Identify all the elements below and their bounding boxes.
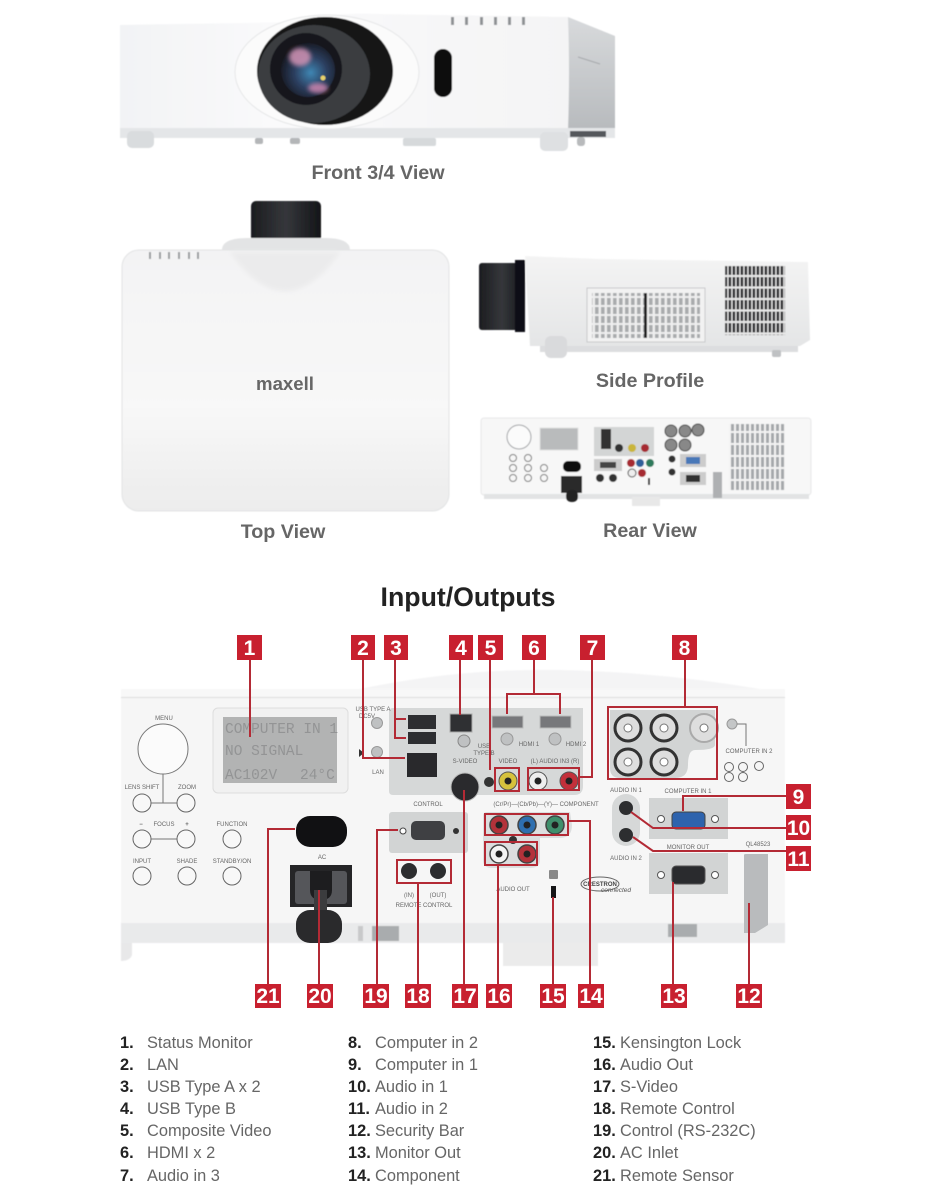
callout number tags, bottom row: 13 bbox=[662, 985, 686, 1008]
connector bay: USB bbox=[478, 744, 490, 750]
callout number tags, top row: 2 bbox=[357, 637, 369, 660]
leader lines and highlight boxes bbox=[250, 660, 787, 985]
control buttons: MENU bbox=[155, 716, 173, 722]
control buttons: FUNCTION bbox=[216, 822, 248, 828]
connector bay: LAN bbox=[372, 770, 384, 776]
legend column 2: Audio in 2 bbox=[375, 1100, 448, 1118]
caption: top view: Top View bbox=[241, 521, 326, 543]
audio in 1 and 2 jacks bbox=[610, 788, 642, 862]
legend column 2: Computer in 2 bbox=[375, 1034, 478, 1052]
status monitor display: COMPUTER IN 1 bbox=[225, 722, 338, 738]
callout number tags, top row bbox=[237, 635, 697, 660]
legend column 1: LAN bbox=[147, 1056, 179, 1074]
callout number tags, top row: 7 bbox=[587, 637, 598, 660]
legend column 3: 19. bbox=[593, 1122, 616, 1140]
AC inlet with cable bbox=[290, 855, 352, 943]
remote sensor bbox=[296, 816, 347, 847]
computer in 2 BNC connectors bbox=[610, 710, 773, 782]
logo: Crestron connected: CRESTRON bbox=[583, 882, 617, 888]
security bar bbox=[744, 854, 768, 933]
photo: front 3/4 view projector bbox=[120, 14, 615, 151]
legend column 3: 21. bbox=[593, 1167, 616, 1185]
connector bay: S-VIDEO bbox=[453, 759, 478, 765]
heading: Input/Outputs: Input/Outputs bbox=[381, 582, 555, 612]
computer in 2 BNC connectors: COMPUTER IN 2 bbox=[725, 749, 773, 755]
legend column 2: 12. bbox=[348, 1122, 371, 1140]
callout number tags, top row: 3 bbox=[390, 637, 402, 660]
legend column 2: 11. bbox=[348, 1100, 370, 1118]
control buttons: STANDBY/ON bbox=[213, 859, 251, 865]
legend column 2 bbox=[348, 1034, 478, 1185]
computer in 1 and monitor out VGA: COMPUTER IN 1 bbox=[664, 789, 712, 795]
control RS-232C port: CONTROL bbox=[413, 802, 443, 808]
connector bay: HDMI 1 bbox=[519, 742, 540, 748]
control buttons: ZOOM bbox=[178, 785, 196, 791]
callout number tags, bottom row: 18 bbox=[406, 985, 430, 1008]
caption: side profile: Side Profile bbox=[596, 370, 704, 392]
legend column 3: Remote Sensor bbox=[620, 1167, 734, 1185]
callout number tags, bottom row: 21 bbox=[256, 985, 280, 1008]
callout number tags, bottom row bbox=[255, 984, 762, 1008]
callout number tags, bottom row: 16 bbox=[487, 985, 511, 1008]
computer in 1 and monitor out VGA: QL48523 bbox=[746, 842, 771, 848]
status monitor display: AC102V bbox=[225, 768, 278, 784]
legend column 1: Status Monitor bbox=[147, 1034, 253, 1052]
component and audio out jacks bbox=[483, 802, 599, 893]
diagram: rear connector panel bbox=[121, 670, 785, 966]
logo: Crestron connected bbox=[581, 877, 631, 894]
control buttons: SHADE bbox=[177, 859, 197, 865]
legend column 1: 1. bbox=[120, 1034, 134, 1052]
legend column 1: Audio in 3 bbox=[147, 1167, 220, 1185]
remote control jacks: (IN) bbox=[404, 893, 414, 899]
callout number tags, bottom row: 17 bbox=[453, 985, 477, 1008]
connector bay: HDMI 2 bbox=[566, 742, 587, 748]
legend column 3: Audio Out bbox=[620, 1056, 693, 1074]
remote control jacks: REMOTE CONTROL bbox=[396, 903, 453, 909]
photo: rear view projector thumbnail bbox=[481, 418, 811, 506]
legend column 2: 8. bbox=[348, 1034, 362, 1052]
connector bay: DC5V bbox=[359, 714, 375, 720]
AC inlet with cable: AC bbox=[318, 855, 327, 861]
callout number tags, bottom row: 19 bbox=[364, 985, 388, 1008]
legend column 2: 10. bbox=[348, 1078, 371, 1096]
audio in 1 and 2 jacks: AUDIO IN 2 bbox=[610, 856, 642, 862]
Kensington lock bbox=[549, 870, 558, 898]
legend column 1: 7. bbox=[120, 1167, 134, 1185]
callout number tags, top row: 4 bbox=[455, 637, 467, 660]
legend column 1: USB Type A x 2 bbox=[147, 1078, 261, 1096]
legend column 3 bbox=[593, 1034, 756, 1185]
caption: rear view: Rear View bbox=[603, 520, 698, 542]
connector bay: (L) AUDIO IN3 (R) bbox=[531, 759, 579, 765]
legend column 1 bbox=[120, 1034, 272, 1185]
legend column 1: USB Type B bbox=[147, 1100, 236, 1118]
legend column 1: 6. bbox=[120, 1144, 134, 1162]
logo: Crestron connected: connected bbox=[601, 887, 631, 894]
component and audio out jacks: AUDIO OUT bbox=[496, 887, 530, 893]
legend column 2: Component bbox=[375, 1167, 460, 1185]
legend column 1: HDMI x 2 bbox=[147, 1144, 215, 1162]
legend column 2: Computer in 1 bbox=[375, 1056, 478, 1074]
callout number tags, right side: 9 bbox=[793, 786, 804, 809]
callout number tags, top row: 8 bbox=[679, 637, 691, 660]
legend column 1: Composite Video bbox=[147, 1122, 272, 1140]
control buttons bbox=[125, 716, 251, 885]
legend column 3: 15. bbox=[593, 1034, 616, 1052]
caption: front view: Front 3/4 View bbox=[311, 162, 445, 184]
legend column 3: Remote Control bbox=[620, 1100, 735, 1118]
callout number tags, right side bbox=[786, 784, 811, 871]
callout number tags, right side: 10 bbox=[787, 817, 810, 840]
callout number tags, top row: 1 bbox=[244, 637, 256, 660]
legend column 1: 5. bbox=[120, 1122, 134, 1140]
legend column 2: Monitor Out bbox=[375, 1144, 461, 1162]
status monitor display: 24°C bbox=[300, 768, 335, 784]
callout number tags, bottom row: 14 bbox=[579, 985, 603, 1008]
computer in 1 and monitor out VGA bbox=[649, 789, 771, 894]
legend column 2: Security Bar bbox=[375, 1122, 465, 1140]
photo: top view projector bbox=[122, 201, 449, 511]
legend column 3: Kensington Lock bbox=[620, 1034, 742, 1052]
remote control jacks bbox=[396, 863, 453, 909]
legend column 1: 4. bbox=[120, 1100, 134, 1118]
callout number tags, top row: 5 bbox=[485, 637, 497, 660]
photo: side profile projector bbox=[479, 256, 810, 358]
legend column 3: 18. bbox=[593, 1100, 616, 1118]
control buttons: LENS SHIFT bbox=[125, 785, 160, 791]
audio in 1 and 2 jacks: AUDIO IN 1 bbox=[610, 788, 642, 794]
panel body bbox=[121, 670, 785, 966]
legend column 2: Audio in 1 bbox=[375, 1078, 448, 1096]
component and audio out jacks: (Cr/Pr)—(Cb/Pb)—(Y)— COMPONENT bbox=[493, 802, 599, 808]
callout number tags, bottom row: 20 bbox=[308, 985, 332, 1008]
control buttons: INPUT bbox=[133, 859, 151, 865]
logo: maxell: maxell bbox=[256, 373, 314, 394]
callout number tags, right side: 11 bbox=[787, 848, 810, 871]
legend column 3: S-Video bbox=[620, 1078, 678, 1096]
status monitor display: NO SIGNAL bbox=[225, 744, 303, 760]
legend column 2: 9. bbox=[348, 1056, 362, 1074]
callout number tags, top row: 6 bbox=[528, 637, 540, 660]
legend column 3: AC Inlet bbox=[620, 1144, 679, 1162]
control buttons: + bbox=[185, 822, 189, 828]
remote control jacks: (OUT) bbox=[430, 893, 446, 899]
connector bay: USB TYPE A bbox=[356, 707, 390, 713]
legend column 3: 16. bbox=[593, 1056, 616, 1074]
callout number tags, bottom row: 12 bbox=[737, 985, 761, 1008]
legend column 3: 17. bbox=[593, 1078, 616, 1096]
connector bay bbox=[356, 707, 587, 801]
control RS-232C port bbox=[389, 802, 468, 853]
legend column 1: 2. bbox=[120, 1056, 134, 1074]
legend column 3: Control (RS-232C) bbox=[620, 1122, 756, 1140]
connector bay: TYPE B bbox=[473, 751, 495, 757]
status monitor display bbox=[213, 708, 348, 793]
legend column 1: 3. bbox=[120, 1078, 134, 1096]
computer in 1 and monitor out VGA: MONITOR OUT bbox=[667, 845, 710, 851]
control buttons: FOCUS bbox=[154, 822, 174, 828]
legend column 3: 20. bbox=[593, 1144, 616, 1162]
connector bay: VIDEO bbox=[499, 759, 518, 765]
callout number tags, bottom row: 15 bbox=[541, 985, 565, 1008]
control buttons: − bbox=[139, 822, 143, 828]
legend column 2: 13. bbox=[348, 1144, 371, 1162]
legend column 2: 14. bbox=[348, 1167, 371, 1185]
